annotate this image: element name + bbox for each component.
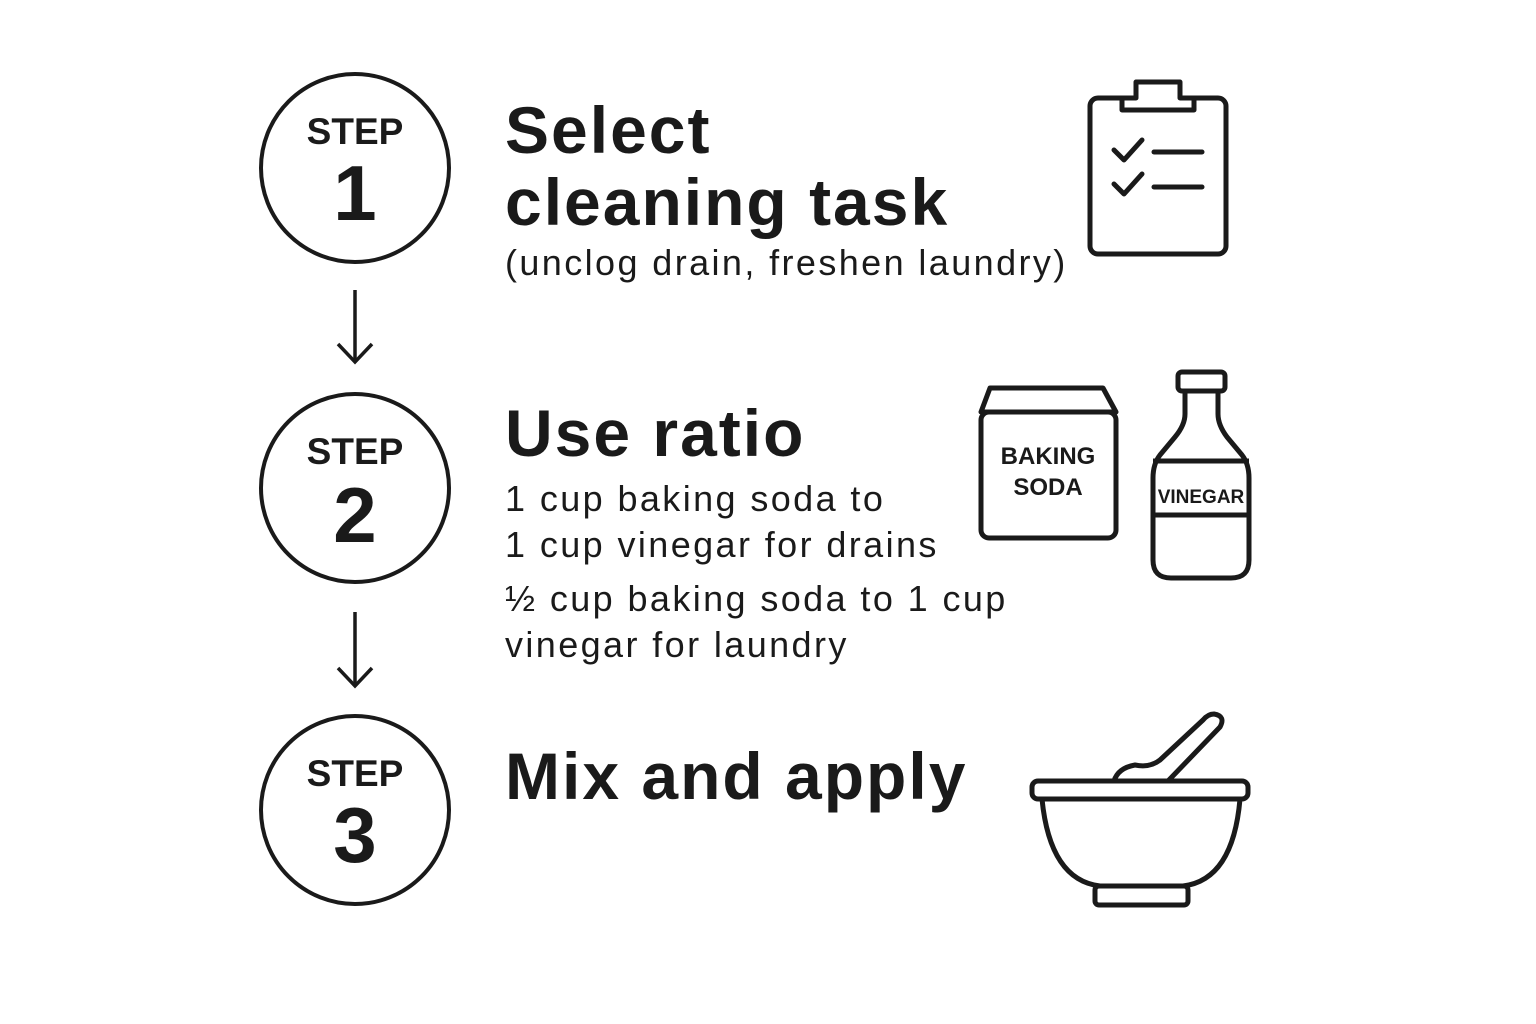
icon: baking soda box <box>981 388 1116 538</box>
step 1 circle: 1 <box>333 149 377 237</box>
ratio text <box>505 478 1008 665</box>
arrow 2 <box>338 612 372 686</box>
ratio text: 1 cup baking soda to <box>505 478 885 519</box>
ratio text: 1 cup vinegar for drains <box>505 524 939 565</box>
step 3 circle <box>261 716 449 904</box>
icon: baking soda box: BAKING <box>1001 443 1095 470</box>
subtext step 1: (unclog drain, freshen laundry) <box>505 242 1068 283</box>
step 1 circle: STEP <box>307 111 403 152</box>
step 2 circle: STEP <box>307 431 403 472</box>
icon: mixing bowl with spoon <box>1032 714 1248 905</box>
heading step 1: cleaning task <box>505 165 949 239</box>
ratio text: ½ cup baking soda to 1 cup <box>505 578 1008 619</box>
heading step 3: Mix and apply <box>505 739 967 813</box>
icon: vinegar bottle: VINEGAR <box>1158 487 1245 508</box>
heading step 2: Use ratio <box>505 396 805 470</box>
step 1 circle <box>261 74 449 262</box>
step 2 circle <box>261 394 449 582</box>
step 3 circle: 3 <box>333 791 377 879</box>
heading step 1 <box>505 93 949 239</box>
icon: baking soda box: SODA <box>1013 474 1083 501</box>
heading step 1: Select <box>505 93 711 167</box>
arrow 1 <box>338 290 372 362</box>
icon: clipboard <box>1090 82 1226 254</box>
step 3 circle: STEP <box>307 753 403 794</box>
icon: vinegar bottle <box>1153 372 1249 578</box>
step 2 circle: 2 <box>333 471 377 559</box>
ratio text: vinegar for laundry <box>505 624 849 665</box>
